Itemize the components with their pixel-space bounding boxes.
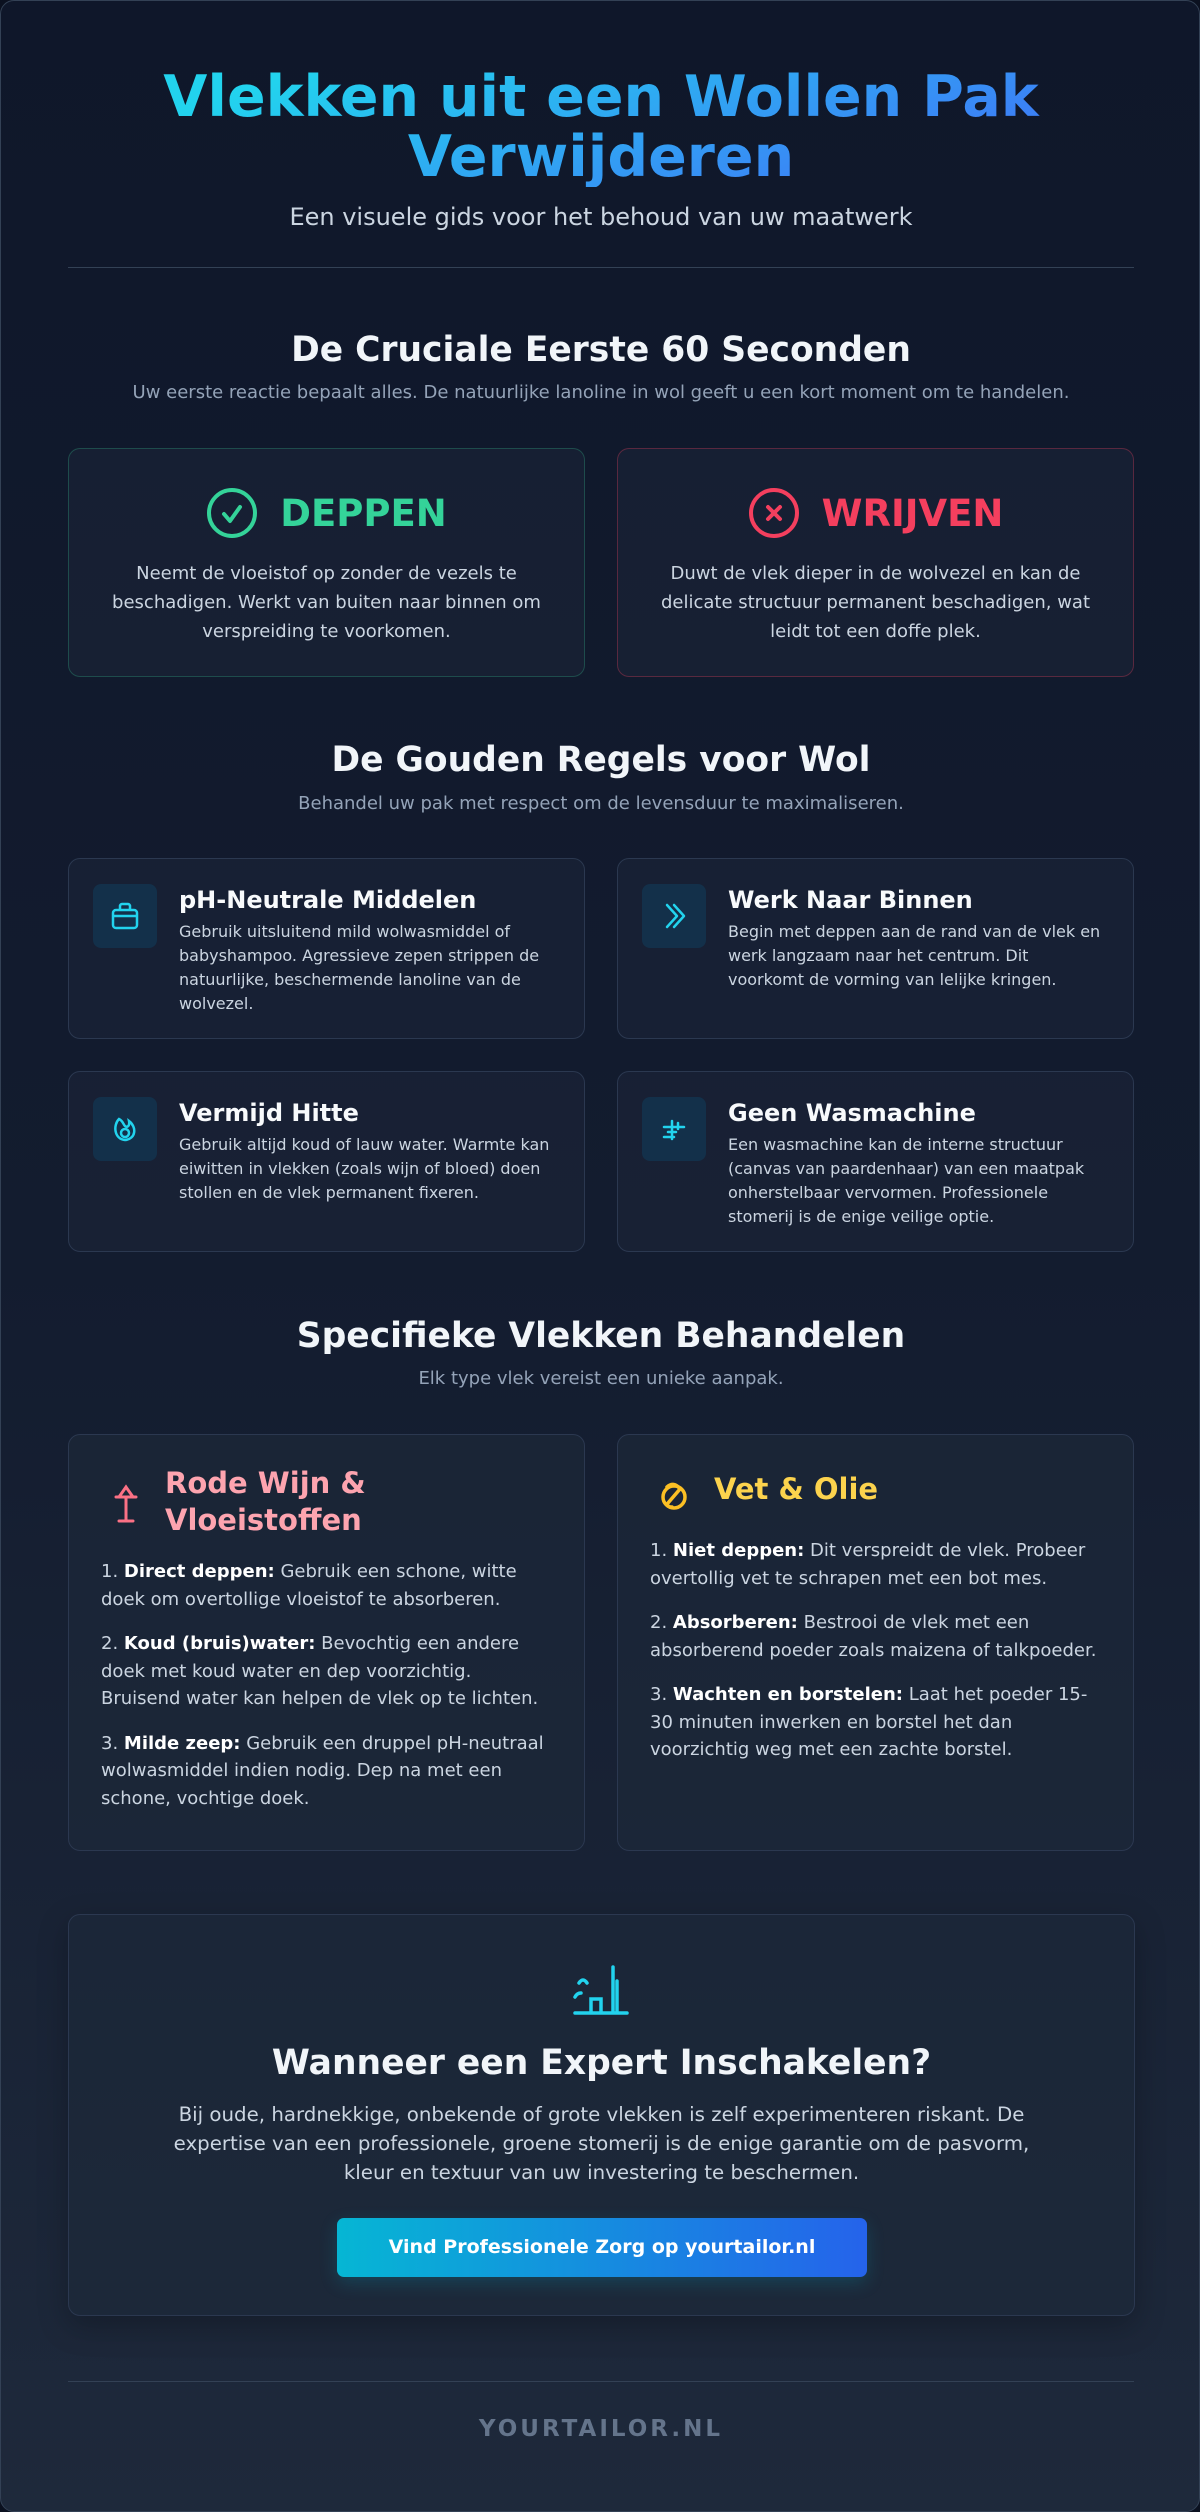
icon: chevrons	[642, 884, 706, 948]
text: avoid heat: Vermijd Hitte	[179, 1099, 359, 1127]
red wine title: Vloeistoffen	[165, 1503, 362, 1537]
text: avoid heat: Gebruik altijd koud of lauw water. Warmte kan eiwitten in vlekken (zoals wijn of bloed) doen stollen en de vlek permanent fixeren.	[179, 1135, 549, 1202]
subtitle: Een visuele gids voor het behoud van uw maatwerk	[289, 203, 913, 231]
panel: ph-neutral	[68, 858, 585, 1039]
panel: deppen	[68, 448, 585, 677]
text: work inward: Begin met deppen aan de rand van de vlek en werk langzaam naar het centrum. Dit voorkomt de vorming van lelijke kringen.	[728, 922, 1100, 989]
panel: grease	[617, 1434, 1134, 1851]
text: ph-neutral: pH-Neutrale Middelen	[179, 886, 476, 914]
button	[337, 2218, 867, 2277]
title: Vlekken uit een Wollen Pak	[163, 64, 1039, 130]
heading: specific stains: Specifieke Vlekken Behandelen	[297, 1316, 905, 1356]
panel: red wine	[68, 1434, 585, 1851]
icon: wine	[114, 1484, 138, 1522]
icon: bag	[93, 884, 157, 948]
icon: cross	[749, 488, 799, 538]
red wine steps: 3. Milde zeep: Gebruik een druppel pH-neutraal wolwasmiddel indien nodig. Dep na met een schone, vochtige doek.	[101, 1732, 544, 1808]
red wine steps: 2. Koud (bruis)water: Bevochtig een andere doek met koud water en dep voorzichtig. Bruisend water kan helpen de vlek op te lichten.	[101, 1633, 538, 1709]
footer: YOURTAILOR.NL	[479, 2416, 723, 2442]
expert text: Bij oude, hardnekkige, onbekende of grote vlekken is zelf experimenteren riskant. De expertise van een professionele, groene stomerij is de enige garantie om de pasvorm, kleur en textuur van uw investering te beschermen.	[174, 2103, 1029, 2184]
text: avoid heat	[179, 1099, 549, 1202]
deppen heading	[207, 488, 447, 538]
icon: store	[573, 1965, 629, 2015]
panel: work inward	[617, 858, 1134, 1039]
panel: avoid heat	[68, 1071, 585, 1252]
grease steps: 3. Wachten en borstelen: Laat het poeder 15-30 minuten inwerken en borstel het dan voorzichtig weg met een zachte borstel.	[650, 1684, 1087, 1760]
red wine title: Rode Wijn &	[165, 1466, 366, 1500]
subheading: specific stains: Elk type vlek vereist een unieke aanpak.	[418, 1368, 784, 1389]
deppen heading: DEPPEN	[280, 492, 447, 534]
panel: expert	[68, 1914, 1135, 2316]
panel: no washing machine	[617, 1071, 1134, 1252]
panel: wrijven	[617, 448, 1134, 677]
icon: check	[207, 488, 257, 538]
icon: grease	[661, 1482, 687, 1510]
red wine title	[165, 1466, 366, 1537]
text: no machine: Geen Wasmachine	[728, 1099, 976, 1127]
title	[1, 67, 1200, 187]
title: Verwijderen	[408, 124, 794, 190]
heading: golden rules: De Gouden Regels voor Wol	[332, 740, 870, 780]
subheading: first 60 seconds: Uw eerste reactie bepaalt alles. De natuurlijke lanoline in wol geeft u een kort moment om te handelen.	[133, 382, 1069, 403]
grease steps: 1. Niet deppen: Dit verspreidt de vlek. Probeer overtollig vet te schrapen met een bot mes.	[650, 1540, 1085, 1588]
grease steps: 2. Absorberen: Bestrooi de vlek met een absorberend poeder zoals maizena of talkpoeder.	[650, 1612, 1096, 1660]
text: no machine: Een wasmachine kan de interne structuur (canvas van paardenhaar) van een maatpak onherstelbaar vervormen. Professionele stomerij is de enige veilige optie.	[728, 1135, 1084, 1226]
button: Vind Professionele Zorg op yourtailor.nl	[389, 2236, 815, 2258]
red wine steps: 1. Direct deppen: Gebruik een schone, witte doek om overtollige vloeistof te absorberen.	[101, 1561, 517, 1610]
wrijven heading: WRIJVEN	[822, 492, 1003, 534]
wrijven heading	[749, 488, 1003, 538]
red wine steps	[101, 1561, 544, 1808]
icon: no machine	[642, 1097, 706, 1161]
deppen text: Neemt de vloeistof op zonder de vezels te beschadigen. Werkt van buiten naar binnen om verspreiding te voorkomen.	[112, 563, 541, 642]
icon: flame	[93, 1097, 157, 1161]
wrijven text: Duwt de vlek dieper in de wolvezel en kan de delicate structuur permanent beschadigen, wat leidt tot een doffe plek.	[661, 563, 1090, 642]
grease title: Vet & Olie	[714, 1472, 878, 1506]
text: ph-neutral: Gebruik uitsluitend mild wolwasmiddel of babyshampoo. Agressieve zepen strippen de natuurlijke, beschermende lanoline van de wolvezel.	[179, 922, 539, 1013]
expert title: Wanneer een Expert Inschakelen?	[272, 2043, 931, 2083]
text: work inward: Werk Naar Binnen	[728, 886, 973, 914]
grease steps	[650, 1540, 1096, 1760]
heading: first 60 seconds: De Cruciale Eerste 60 Seconden	[291, 330, 911, 370]
text: work inward	[728, 886, 1100, 989]
subheading: golden rules: Behandel uw pak met respect om de levensduur te maximaliseren.	[298, 793, 904, 814]
